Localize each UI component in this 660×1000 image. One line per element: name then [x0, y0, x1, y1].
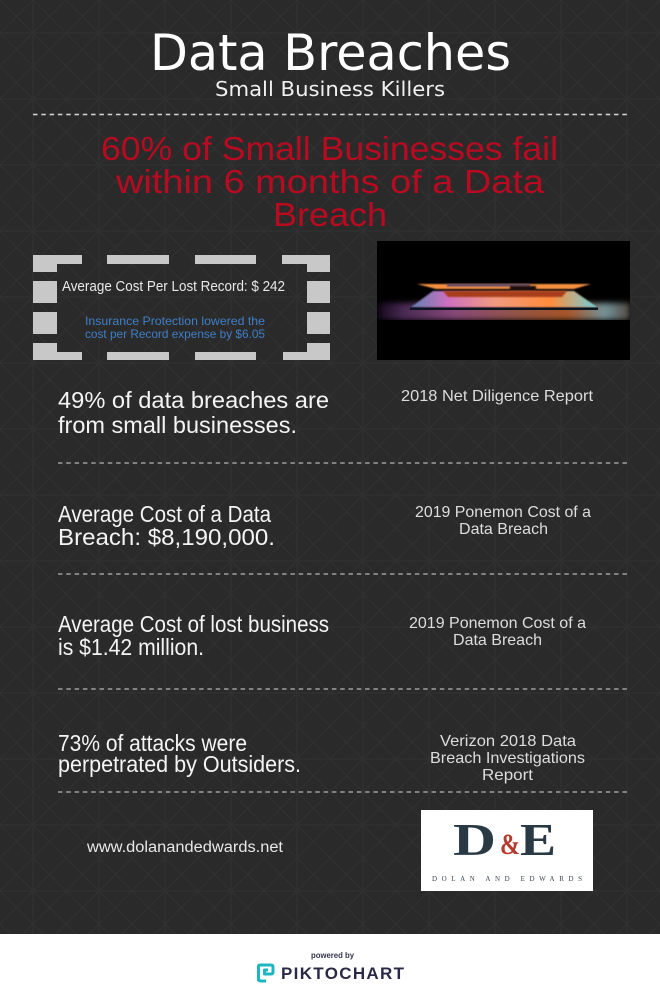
stat: outsiders: [58, 730, 301, 777]
logo: Dolan and Edwards: [421, 810, 593, 891]
stat: lost business: [58, 611, 329, 660]
logo: Dolan and Edwards: E: [520, 814, 556, 865]
headline statistic: Breach: [273, 196, 387, 233]
stat: average breach cost: Average Cost of a Data: [58, 501, 271, 527]
source: verizon: Breach Investigations: [430, 750, 585, 767]
stat: lost business: is $1.42 million.: [58, 634, 204, 660]
insurance note: [85, 314, 265, 341]
stat: small business share: [58, 387, 329, 438]
source: verizon: Report: [482, 767, 534, 784]
subtitle: Small Business Killers: [215, 77, 445, 101]
logo: Dolan and Edwards: DOLAN AND EDWARDS: [432, 875, 582, 883]
logo: Dolan and Edwards: &: [500, 828, 520, 861]
wordmark: PIKTOCHART: [281, 964, 405, 983]
stat: average breach cost: [58, 501, 275, 550]
logo: Dolan and Edwards: D: [453, 814, 496, 865]
dashed frame: [33, 255, 330, 360]
website: www.dolanandedwards.net: [86, 839, 284, 856]
footer: Piktochart: [0, 934, 660, 1000]
icon: Piktochart mark: [258, 965, 273, 981]
source: net diligence: 2018 Net Diligence Report: [401, 388, 594, 405]
source: ponemon second: 2019 Ponemon Cost of a: [409, 615, 586, 632]
panel: cost per record: [33, 255, 330, 360]
source: ponemon second: [409, 615, 586, 649]
source: ponemon: 2019 Ponemon Cost of a: [415, 504, 591, 521]
image: glowing laptop: [377, 241, 630, 360]
insurance note: Insurance Protection lowered the: [85, 314, 265, 328]
headline statistic: 60% of Small Businesses fail: [101, 130, 558, 167]
stat: small business share: from small businesses.: [58, 412, 297, 438]
stat: small business share: 49% of data breaches are: [58, 387, 329, 413]
source: ponemon: Data Breach: [459, 521, 548, 538]
cost per record text: Average Cost Per Lost Record: $ 242: [62, 279, 285, 295]
source: ponemon: [415, 504, 591, 538]
stat: average breach cost: Breach: $8,190,000.: [58, 524, 275, 550]
stat: lost business: Average Cost of lost business: [58, 611, 329, 637]
source: verizon: [430, 733, 585, 784]
stat: outsiders: 73% of attacks were: [58, 730, 247, 756]
stat: outsiders: perpetrated by Outsiders.: [58, 751, 301, 777]
title: Data Breaches: [150, 24, 511, 82]
headline statistic: [101, 130, 558, 233]
insurance note: cost per Record expense by $6.05: [85, 327, 265, 341]
headline statistic: within 6 months of a Data: [115, 163, 545, 200]
source: verizon: Verizon 2018 Data: [440, 733, 576, 750]
source: ponemon second: Data Breach: [453, 632, 542, 649]
powered by: powered by: [311, 951, 355, 960]
